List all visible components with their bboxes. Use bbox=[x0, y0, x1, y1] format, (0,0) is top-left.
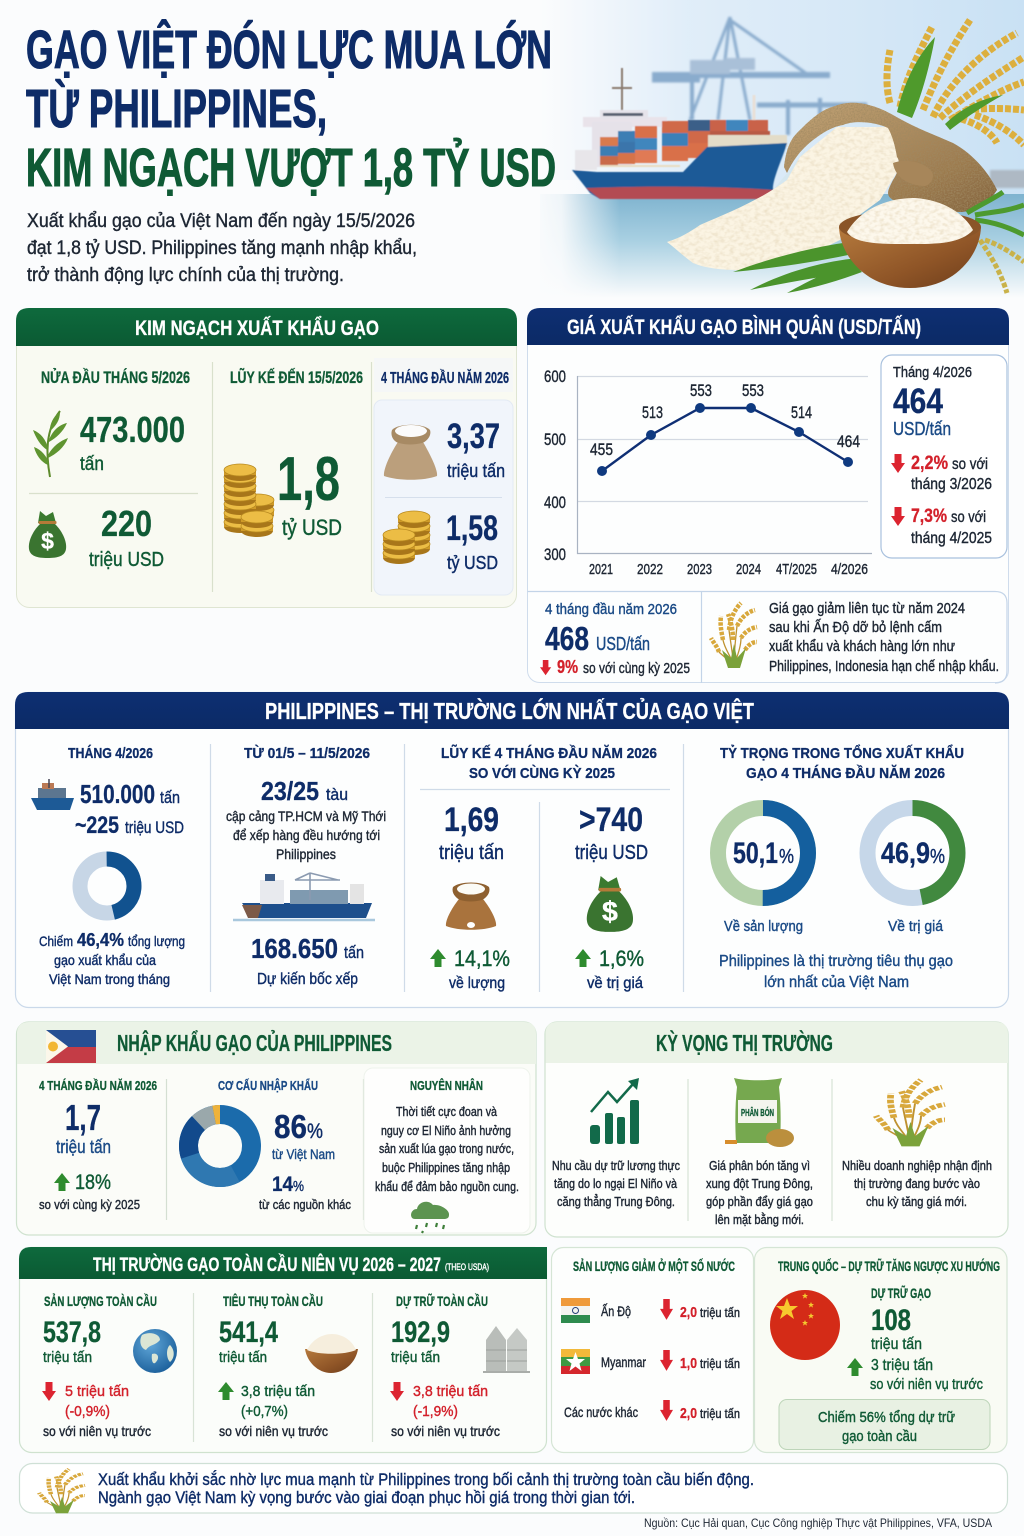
stat: dự trữ gạo 108 triệu tấn: DỰ TRỮ GẠO bbox=[871, 1284, 931, 1301]
column: tỷ trọng: Về trị giá bbox=[888, 918, 944, 935]
icon: bowl of rice bbox=[305, 1334, 358, 1373]
column: giá phân bón: Giá phân bón tăng vì bbox=[709, 1158, 810, 1173]
column: cơ cấu nhập khẩu: từ Việt Nam bbox=[272, 1146, 335, 1162]
stat: 1,8 tỷ USD bbox=[277, 445, 342, 540]
callout: tháng 4/2026: 2,2% bbox=[911, 453, 948, 474]
line chart: 2024 bbox=[736, 561, 761, 578]
donut chart: 46,9% về trị giá: 46,9 bbox=[881, 837, 930, 870]
column: tháng 4/2026: 46,4% bbox=[77, 930, 124, 950]
donut chart: 46,4% bbox=[80, 859, 134, 913]
row: ấn độ: Ấn Độ bbox=[601, 1303, 631, 1319]
callout: tháng 4/2026: tháng 3/2026 bbox=[911, 476, 992, 493]
column: cơ cấu nhập khẩu: 86 bbox=[274, 1108, 307, 1145]
stat: 1,6% về trị giá bbox=[575, 946, 644, 992]
stat: dự trữ gạo 108 triệu tấn: 3 triệu tấn bbox=[871, 1357, 933, 1374]
column: từ 01/5 – 11/5/2026: 168.650 bbox=[251, 933, 338, 964]
column: sản lượng toàn cầu bbox=[42, 1293, 177, 1439]
column: dự trữ toàn cầu: 3,8 triệu tấn bbox=[413, 1383, 488, 1400]
stat: 220 triệu USD bbox=[89, 503, 164, 571]
column: tỷ trọng: Philippines là thị trường tiêu thụ gạo bbox=[719, 953, 953, 970]
donut chart: 46,9% về trị giá: % bbox=[930, 846, 945, 868]
row: myanmar: 1,0 bbox=[680, 1355, 697, 1372]
line chart: 514 bbox=[791, 403, 812, 422]
stat: dự trữ gạo 108 triệu tấn: 108 bbox=[871, 1304, 911, 1337]
column: 4 tháng đầu năm 2026: triệu tấn bbox=[56, 1137, 111, 1157]
line chart: 553 bbox=[742, 381, 764, 400]
panel: kỳ vọng thị trường bbox=[545, 1022, 1008, 1237]
column: cơ cấu nhập khẩu: % bbox=[307, 1120, 323, 1143]
column: lũy kế 4 tháng: triệu USD bbox=[575, 842, 648, 864]
flag: india bbox=[561, 1298, 590, 1323]
note text: xuất khẩu và khách hàng lớn như bbox=[769, 638, 955, 655]
panel: giá xuất khẩu gạo bình quân bbox=[527, 308, 1009, 683]
conclusion text: Xuất khẩu khởi sắc nhờ lực mua mạnh từ Philippines trong bối cảnh thị trường toàn cầu biến động. bbox=[98, 1470, 754, 1489]
panel: sản lượng giảm ở một số nước bbox=[552, 1248, 754, 1452]
panel: philippines thị trường lớn nhất bbox=[15, 692, 1009, 1008]
icon: rice stalk bbox=[39, 1469, 85, 1513]
stat: 14,1% về lượng: 14,1% bbox=[454, 946, 510, 971]
icon: money bag bbox=[587, 876, 633, 932]
column: giá phân bón: góp phần đẩy giá gạo bbox=[706, 1194, 813, 1209]
column: lũy kế 4 tháng bbox=[430, 744, 657, 992]
stat: 4 tháng đầu năm 2026: so với cùng kỳ 2025 bbox=[583, 660, 690, 677]
callout: tháng 4/2026: USD/tấn bbox=[893, 419, 951, 439]
column: từ 01/5 – 11/5/2026: TỪ 01/5 – 11/5/2026 bbox=[244, 744, 370, 762]
column: tiêu thụ toàn cầu: so với niên vụ trước bbox=[219, 1423, 328, 1439]
stat: 3,37 triệu tấn bbox=[447, 417, 505, 481]
column: tháng 4/2026: tấn bbox=[160, 788, 180, 807]
hero illustration: port, ship and rice bbox=[530, 0, 1024, 300]
stat: 4 tháng đầu năm 2026 bbox=[540, 601, 690, 677]
column: dự trữ toàn cầu: (-1,9%) bbox=[413, 1403, 458, 1420]
row: ấn độ: 2,0 bbox=[680, 1304, 697, 1321]
column: từ 01/5 – 11/5/2026: tàu bbox=[326, 785, 348, 804]
stat: 1,58 tỷ USD bbox=[446, 509, 498, 573]
column: từ 01/5 – 11/5/2026 bbox=[226, 744, 386, 988]
line chart: 400 bbox=[544, 493, 566, 512]
intro text: Xuất khẩu gạo của Việt Nam đến ngày 15/5/2026 bbox=[27, 211, 415, 232]
stat: 220 triệu USD: 220 bbox=[101, 503, 152, 544]
panel heading: SẢN LƯỢNG GIẢM Ở MỘT SỐ NƯỚC bbox=[573, 1257, 735, 1274]
column: từ 01/5 – 11/5/2026: Philippines bbox=[276, 846, 336, 862]
sub-panel: 4 tháng đầu năm 2026 bbox=[374, 358, 513, 595]
donut chart: 50,1% về sản lượng: 50,1 bbox=[733, 837, 778, 870]
column: 4 tháng đầu năm 2026: so với cùng kỳ 2025 bbox=[39, 1197, 140, 1212]
column dividers bbox=[29, 362, 372, 592]
icon: fertilizer bag: PHÂN BÓN bbox=[741, 1106, 774, 1119]
column: sản lượng toàn cầu: SẢN LƯỢNG TOÀN CẦU bbox=[44, 1293, 157, 1309]
column: giá phân bón: xung đột Trung Đông, bbox=[706, 1176, 813, 1191]
callout: tháng 4/2026: so với bbox=[952, 456, 988, 473]
line chart bbox=[544, 367, 872, 578]
column: nhiều doanh nghiệp: Nhiều doanh nghiệp nhận định bbox=[842, 1158, 992, 1173]
note text bbox=[769, 600, 999, 675]
stat: 473.000 tấn: tấn bbox=[80, 454, 104, 475]
title: GẠO VIỆT ĐÓN LỰC MUA LỚN bbox=[26, 19, 552, 80]
column: từ 01/5 – 11/5/2026: 23/25 bbox=[261, 776, 319, 806]
stat: dự trữ gạo 108 triệu tấn: triệu tấn bbox=[871, 1336, 922, 1353]
column: nhu cầu dự trữ: tăng do lo ngại El Niño và bbox=[554, 1176, 678, 1191]
stat: 3,37 triệu tấn: 3,37 bbox=[447, 417, 500, 456]
conclusion text: Ngành gạo Việt Nam kỳ vọng bước vào giai đoạn phục hồi giá trong thời gian tới. bbox=[98, 1488, 635, 1507]
intro text: trở thành động lực chính của thị trường. bbox=[27, 265, 344, 286]
column: tháng 4/2026: Chiếm bbox=[39, 933, 73, 949]
icon: coins bbox=[383, 511, 430, 564]
icon: silos bbox=[483, 1326, 530, 1373]
column: từ 01/5 – 11/5/2026: cập cảng TP.HCM và Mỹ Thới bbox=[226, 808, 386, 824]
panel: nhập khẩu gạo của philippines bbox=[16, 1022, 536, 1235]
row: ấn độ bbox=[561, 1298, 740, 1323]
note text: sau khi Ấn Độ dỡ bỏ lệnh cấm bbox=[769, 619, 942, 636]
icon: rice sack bbox=[446, 882, 496, 930]
stat: 1,6% về trị giá: về trị giá bbox=[587, 975, 643, 992]
column: cơ cấu nhập khẩu: từ các nguồn khác bbox=[259, 1197, 351, 1212]
column: tiêu thụ toàn cầu: triệu tấn bbox=[219, 1349, 267, 1366]
column: 4 tháng đầu năm 2026: 1,7 bbox=[65, 1097, 101, 1138]
column: tiêu thụ toàn cầu: (+0,7%) bbox=[241, 1403, 288, 1420]
stat: 4 tháng đầu năm 2026: 9% bbox=[557, 657, 578, 677]
callout: tháng 4/2026: 7,3% bbox=[911, 506, 947, 527]
column: 4 tháng đầu năm 2026: 4 THÁNG ĐẦU NĂM 2026 bbox=[39, 1078, 157, 1093]
callout: chiếm 56%: Chiếm 56% tổng dự trữ bbox=[818, 1409, 955, 1426]
stat: 1,8 tỷ USD: tỷ USD bbox=[282, 515, 342, 540]
column: giá phân bón bbox=[706, 1078, 813, 1227]
row: myanmar: triệu tấn bbox=[700, 1356, 740, 1371]
column: dự trữ toàn cầu: so với niên vụ trước bbox=[391, 1423, 500, 1439]
column: 4 tháng đầu năm 2026: 18% bbox=[75, 1171, 111, 1194]
column: sản lượng toàn cầu: triệu tấn bbox=[43, 1349, 92, 1366]
stat: 4 tháng đầu năm 2026: 468 bbox=[545, 620, 589, 657]
line chart: 513 bbox=[642, 403, 663, 422]
donut chart: 50,1% về sản lượng: % bbox=[779, 846, 794, 868]
column: sản lượng toàn cầu: 537,8 bbox=[43, 1316, 101, 1349]
stat: dự trữ gạo 108 triệu tấn: so với niên vụ trước bbox=[870, 1376, 983, 1393]
stat: 14,1% về lượng: về lượng bbox=[449, 975, 505, 992]
column: tháng 4/2026: 510.000 bbox=[80, 779, 155, 809]
stat: 1,58 tỷ USD: 1,58 bbox=[446, 509, 498, 548]
column: lũy kế 4 tháng: SO VỚI CÙNG KỲ 2025 bbox=[469, 764, 615, 782]
column: tiêu thụ toàn cầu: 541,4 bbox=[219, 1316, 278, 1349]
column: giá phân bón: lên mặt bằng mới. bbox=[715, 1212, 804, 1227]
stat: 14,1% về lượng bbox=[430, 946, 510, 992]
column: tiêu thụ toàn cầu: TIÊU THỤ TOÀN CẦU bbox=[223, 1292, 323, 1309]
flag: china bbox=[770, 1290, 840, 1360]
icon: money bag: $ bbox=[41, 528, 54, 554]
column: cơ cấu nhập khẩu bbox=[188, 1078, 351, 1212]
column: từ 01/5 – 11/5/2026: để xếp hàng đều hướng tới bbox=[233, 827, 380, 843]
line chart: 2021 bbox=[589, 561, 613, 578]
column: từ 01/5 – 11/5/2026: Dự kiến bốc xếp bbox=[257, 971, 358, 988]
row: các nước khác: 2,0 bbox=[680, 1405, 697, 1422]
callout: tháng 4/2026: so với bbox=[951, 509, 986, 526]
column: nguyên nhân: NGUYÊN NHÂN bbox=[410, 1078, 483, 1093]
callout: chiếm 56% bbox=[779, 1400, 990, 1450]
stat: 1,8 tỷ USD: 1,8 bbox=[277, 445, 340, 514]
stat: 4 tháng đầu năm 2026: USD/tấn bbox=[596, 634, 650, 654]
column: nguyên nhân: nguy cơ El Niño ảnh hưởng bbox=[381, 1123, 511, 1138]
title bbox=[26, 19, 556, 198]
flag: philippines bbox=[46, 1030, 96, 1063]
line chart: 600 bbox=[544, 367, 566, 386]
panel: kim ngạch xuất khẩu gạo bbox=[16, 308, 517, 608]
panel heading: KIM NGẠCH XUẤT KHẨU GẠO bbox=[135, 317, 379, 340]
column: tháng 4/2026: gạo xuất khẩu của bbox=[54, 952, 156, 968]
column: cơ cấu nhập khẩu: % bbox=[293, 1178, 304, 1195]
column: cơ cấu nhập khẩu: CƠ CẤU NHẬP KHẨU bbox=[218, 1078, 318, 1093]
line chart: 4T/2025 bbox=[776, 561, 817, 578]
column: tiêu thụ toàn cầu bbox=[218, 1292, 358, 1439]
column heading: lũy kế: LŨY KẾ ĐẾN 15/5/2026 bbox=[230, 367, 363, 387]
note text: Giá gạo giảm liên tục từ năm 2024 bbox=[769, 600, 965, 617]
column: tháng 4/2026: ~225 bbox=[75, 812, 119, 839]
line chart: 2023 bbox=[687, 561, 712, 578]
icon: globe bbox=[133, 1329, 177, 1373]
column: 4 tháng đầu năm 2026 bbox=[39, 1078, 157, 1212]
column: tỷ trọng: Về sản lượng bbox=[724, 918, 803, 935]
row: các nước khác bbox=[564, 1400, 740, 1422]
column: nhiều doanh nghiệp bbox=[842, 1080, 992, 1209]
intro text: đạt 1,8 tỷ USD. Philippines tăng mạnh nhập khẩu, bbox=[27, 238, 417, 259]
column: nhu cầu dự trữ: căng thẳng Trung Đông. bbox=[557, 1194, 675, 1209]
column: từ 01/5 – 11/5/2026: tấn bbox=[344, 943, 364, 962]
callout: tháng 4/2026 bbox=[881, 355, 1007, 558]
icon: coins bbox=[224, 464, 274, 537]
column heading: nửa đầu tháng 5: NỬA ĐẦU THÁNG 5/2026 bbox=[41, 368, 190, 387]
column: nhiều doanh nghiệp: chu kỳ tăng giá mới. bbox=[866, 1194, 967, 1209]
column: tiêu thụ toàn cầu: 3,8 triệu tấn bbox=[241, 1383, 315, 1400]
column: tháng 4/2026: Việt Nam trong tháng bbox=[49, 971, 170, 987]
stat: dự trữ gạo 108 triệu tấn bbox=[847, 1284, 983, 1393]
icon: ship at port bbox=[233, 873, 375, 920]
column: nguyên nhân bbox=[364, 1068, 530, 1233]
lower row frame bbox=[528, 591, 1007, 683]
column: lũy kế 4 tháng: triệu tấn bbox=[439, 842, 504, 864]
line chart: 4/2026 bbox=[831, 561, 868, 578]
panel: thị trường gạo toàn cầu bbox=[19, 1247, 547, 1452]
callout: tháng 4/2026: tháng 4/2025 bbox=[911, 530, 992, 547]
stat: 1,6% về trị giá: 1,6% bbox=[599, 946, 644, 971]
line chart: 455 bbox=[590, 440, 613, 459]
flag: myanmar bbox=[561, 1349, 590, 1374]
panel heading: (THEO USDA) bbox=[445, 1262, 489, 1272]
icon: cargo ship bbox=[31, 779, 74, 810]
column: tháng 4/2026: tổng lượng bbox=[128, 933, 185, 949]
column: tỷ trọng: GẠO 4 THÁNG ĐẦU NĂM 2026 bbox=[746, 765, 945, 782]
column: dự trữ toàn cầu: triệu tấn bbox=[391, 1349, 440, 1366]
panel heading: GIÁ XUẤT KHẨU GẠO BÌNH QUÂN (USD/TẤN) bbox=[567, 315, 921, 339]
icon: fertilizer bag bbox=[725, 1078, 794, 1147]
row: ấn độ: triệu tấn bbox=[700, 1305, 740, 1320]
panel heading: THỊ TRƯỜNG GẠO TOÀN CẦU NIÊN VỤ 2026 – 2027 bbox=[93, 1254, 441, 1276]
donut chart: import structure bbox=[188, 1114, 252, 1178]
icon: rice stalk bbox=[876, 1080, 945, 1146]
stat: 220 triệu USD: triệu USD bbox=[89, 549, 164, 571]
column: tỷ trọng: TỶ TRỌNG TRONG TỔNG XUẤT KHẨU bbox=[720, 744, 964, 762]
column: lũy kế 4 tháng: LŨY KẾ 4 THÁNG ĐẦU NĂM 2026 bbox=[441, 744, 657, 762]
icon: rice sprig bbox=[33, 411, 68, 477]
column: tháng 4/2026: THÁNG 4/2026 bbox=[68, 745, 153, 762]
icon: rice stalk bbox=[711, 603, 757, 668]
column: tỷ trọng bbox=[718, 744, 964, 991]
stat: 3,37 triệu tấn: triệu tấn bbox=[447, 461, 505, 481]
stat: 4 tháng đầu năm 2026: 4 tháng đầu năm 2026 bbox=[545, 601, 677, 618]
icon: money bag bbox=[29, 511, 66, 558]
stat: 473.000 tấn bbox=[80, 409, 185, 475]
column: nhiều doanh nghiệp: thị trường đang bước vào bbox=[854, 1176, 980, 1191]
column: dự trữ toàn cầu bbox=[390, 1292, 530, 1439]
column: sản lượng toàn cầu: 5 triệu tấn bbox=[65, 1383, 129, 1400]
row: myanmar: Myanmar bbox=[601, 1354, 646, 1370]
panel heading: KỲ VỌNG THỊ TRƯỜNG bbox=[656, 1029, 833, 1056]
column: tháng 4/2026 bbox=[31, 745, 185, 987]
donut chart: 46,9% về trị giá bbox=[868, 808, 958, 898]
icon: rice sack bbox=[384, 425, 437, 480]
panel heading: PHILIPPINES – THỊ TRƯỜNG LỚN NHẤT CỦA GẠO VIỆT bbox=[265, 696, 754, 724]
column: lũy kế 4 tháng: 1,69 bbox=[444, 801, 499, 839]
row: các nước khác: Các nước khác bbox=[564, 1404, 638, 1420]
row: myanmar bbox=[561, 1349, 740, 1374]
column: sản lượng toàn cầu: so với niên vụ trước bbox=[43, 1423, 151, 1439]
column: nguyên nhân: buộc Philippines tăng nhập bbox=[382, 1160, 510, 1175]
column: sản lượng toàn cầu: (-0,9%) bbox=[65, 1403, 110, 1420]
intro text bbox=[27, 211, 417, 286]
icon: rain cloud bbox=[411, 1202, 449, 1233]
column: lũy kế 4 tháng: >740 bbox=[579, 801, 643, 839]
line chart: 300 bbox=[544, 545, 566, 564]
title: KIM NGẠCH VƯỢT 1,8 TỶ USD bbox=[26, 138, 556, 198]
row: các nước khác: triệu tấn bbox=[700, 1406, 740, 1421]
column: dự trữ toàn cầu: 192,9 bbox=[391, 1316, 450, 1349]
column: tỷ trọng: lớn nhất của Việt Nam bbox=[764, 974, 909, 991]
callout: tháng 4/2026: Tháng 4/2026 bbox=[893, 364, 972, 381]
panel: trung quốc bbox=[754, 1248, 1007, 1452]
column: dự trữ toàn cầu: DỰ TRỮ TOÀN CẦU bbox=[396, 1292, 488, 1309]
callout: chiếm 56%: gạo toàn cầu bbox=[842, 1428, 917, 1445]
column: nguyên nhân: khẩu để đảm bảo nguồn cung. bbox=[375, 1179, 519, 1194]
donut chart: 50,1% về sản lượng bbox=[718, 808, 808, 898]
callout: tháng 4/2026: 464 bbox=[893, 382, 943, 421]
column: nguyên nhân: Thời tiết cực đoan và bbox=[396, 1104, 498, 1119]
footer conclusion bar bbox=[20, 1464, 1008, 1513]
column: nguyên nhân: sản xuất lúa gạo trong nước, bbox=[379, 1141, 514, 1156]
stat: 473.000 tấn: 473.000 bbox=[80, 409, 185, 450]
line chart: 2022 bbox=[637, 561, 663, 578]
line chart: 553 bbox=[690, 381, 712, 400]
column: nhu cầu dự trữ bbox=[552, 1078, 680, 1209]
title: TỪ PHILIPPINES, bbox=[26, 79, 327, 139]
icon: growth chart bbox=[590, 1078, 639, 1144]
sub-heading: 4 THÁNG ĐẦU NĂM 2026 bbox=[381, 368, 509, 387]
column: nhu cầu dự trữ: Nhu cầu dự trữ lương thực bbox=[552, 1158, 680, 1173]
column: tháng 4/2026: triệu USD bbox=[125, 818, 184, 837]
column: cơ cấu nhập khẩu: 14 bbox=[272, 1173, 293, 1196]
panel heading: NHẬP KHẨU GẠO CỦA PHILIPPINES bbox=[117, 1028, 392, 1056]
stat: 1,58 tỷ USD: tỷ USD bbox=[447, 553, 498, 573]
line chart: 500 bbox=[544, 430, 566, 449]
icon: money bag: $ bbox=[602, 897, 618, 927]
line chart: 464 bbox=[837, 432, 860, 451]
conclusion text bbox=[98, 1470, 754, 1507]
